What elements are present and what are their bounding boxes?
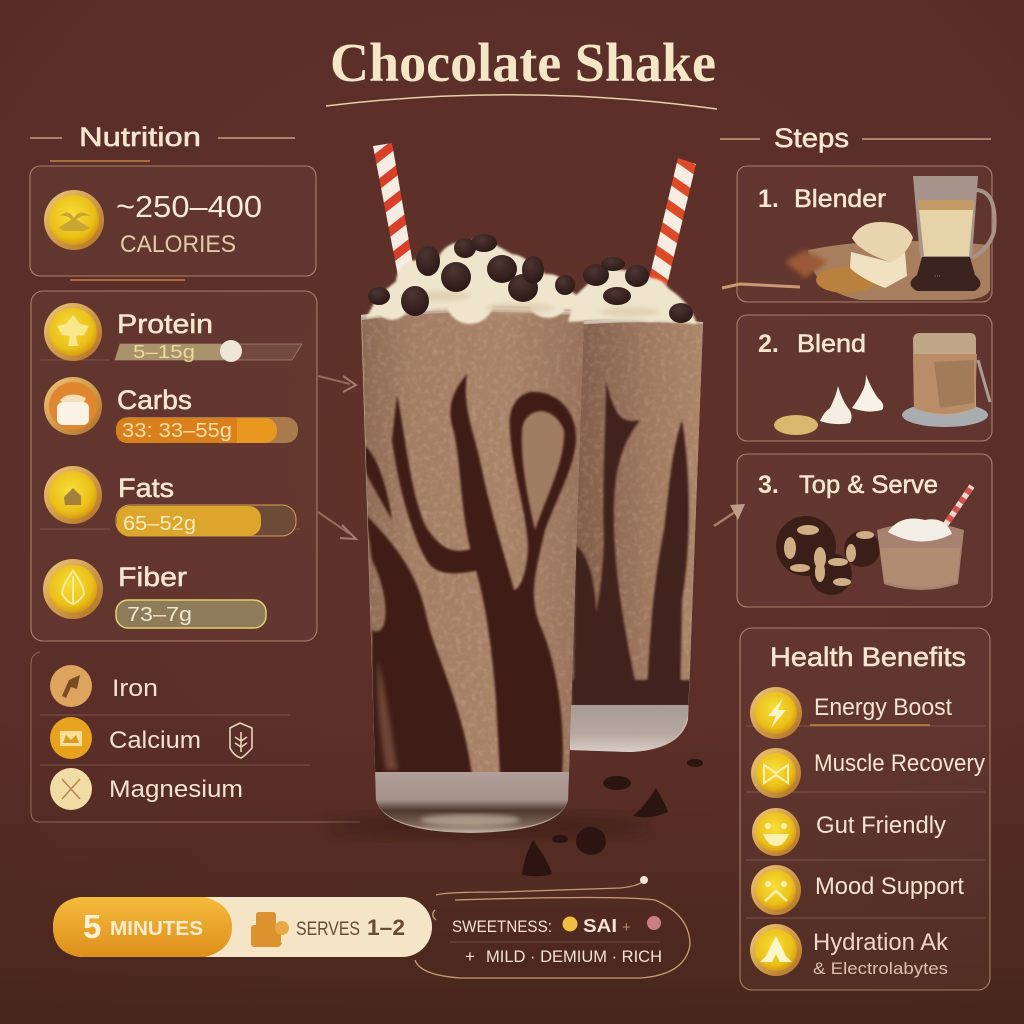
benefit: hydration: & Electrolabytes xyxy=(813,959,948,978)
bar: protein: 5–15g xyxy=(133,342,195,362)
mineral: iron: Iron xyxy=(112,675,158,702)
panel: macros xyxy=(31,291,317,641)
step 1 xyxy=(722,166,995,302)
step 3: Top & Serve xyxy=(799,471,938,499)
panel: steps xyxy=(714,123,995,607)
icon: calories coin xyxy=(44,190,104,250)
step 3: 3. xyxy=(758,471,779,499)
illustration: cookie and cream xyxy=(774,375,883,435)
title: Chocolate Shake xyxy=(330,32,716,93)
mineral: magnesium xyxy=(50,768,243,810)
time pill: MINUTES xyxy=(110,918,203,940)
panel: sweetness: + xyxy=(622,919,631,936)
bar: carbs: 33: 33–55g xyxy=(122,420,232,442)
bar: fats xyxy=(116,505,296,536)
benefit: energy boost: Energy Boost xyxy=(814,694,952,721)
macro: carbs: Carbs xyxy=(117,385,192,415)
benefit: gut friendly xyxy=(752,808,946,856)
benefit: hydration: Hydration Ak xyxy=(813,929,949,956)
servings text: SERVES xyxy=(296,919,360,940)
macro: protein xyxy=(44,303,302,362)
bar: protein xyxy=(115,340,302,362)
benefit: mood support xyxy=(751,865,964,915)
icon: servings xyxy=(251,912,289,947)
macro: fiber: Fiber xyxy=(118,562,187,592)
scattered chocolate chips xyxy=(522,759,703,876)
illustration: blend jug xyxy=(902,333,990,427)
mineral: iron xyxy=(50,665,158,707)
step 3 xyxy=(737,454,992,607)
illustration: blender xyxy=(910,176,995,291)
macro: fats: Fats xyxy=(118,473,174,503)
macro: fats xyxy=(44,466,296,536)
straw: back xyxy=(649,158,696,285)
icon: protein coin xyxy=(44,303,102,361)
arrows: nutrition to shake xyxy=(318,376,356,539)
macro: protein: Protein xyxy=(117,309,213,339)
panel: sweetness: SWEETNESS: xyxy=(452,917,552,936)
benefit: hydration xyxy=(750,924,949,978)
step 1: Blender xyxy=(794,185,886,213)
bar: carbs xyxy=(116,417,298,443)
mineral: magnesium: Magnesium xyxy=(109,776,243,803)
panel: health benefits xyxy=(740,628,990,990)
panel: calories xyxy=(30,166,316,276)
bar: fats: 65–52g xyxy=(123,513,196,535)
servings text: 1–2 xyxy=(367,915,405,940)
calories label: CALORIES xyxy=(120,231,236,258)
illustration: served glass with straw xyxy=(877,486,972,590)
step 1: 1. xyxy=(758,185,779,213)
panel: minerals xyxy=(31,652,360,822)
step 2: Blend xyxy=(797,330,866,358)
heading: steps: Steps xyxy=(774,123,849,153)
panel: sweetness xyxy=(415,876,690,978)
straw: front xyxy=(373,143,414,276)
arrow: step 3 xyxy=(714,504,745,526)
whipped cream xyxy=(366,236,697,324)
icon: fiber coin xyxy=(43,559,103,619)
panel: sweetness: MILD · DEMIUM · RICH xyxy=(486,947,662,966)
calories value: ~250–400 xyxy=(116,189,262,224)
panel: nutrition xyxy=(30,122,317,641)
illustration: plate and cake xyxy=(785,222,990,300)
mineral: calcium: Calcium xyxy=(109,727,201,754)
servings text xyxy=(296,915,405,940)
bar: fiber: 73–7g xyxy=(127,604,192,626)
benefit: muscle recovery: Muscle Recovery xyxy=(814,750,985,777)
step 2 xyxy=(737,315,992,441)
panel: sweetness: + xyxy=(465,947,475,966)
time pill: 5 xyxy=(83,908,101,945)
icon: carbs coin xyxy=(44,377,102,435)
glass: back xyxy=(570,319,710,752)
bottom bar: time and servings xyxy=(53,897,432,957)
panel: sweetness: SAI xyxy=(583,916,617,936)
benefit: muscle recovery xyxy=(751,748,985,798)
chocolate chips on cream xyxy=(368,234,693,323)
benefit: mood support: Mood Support xyxy=(815,873,964,900)
illustration: chocolate shakes xyxy=(330,143,710,876)
floor shadow xyxy=(330,812,650,840)
illustration: blender: ∙∙∙ xyxy=(934,271,941,280)
step 2: 2. xyxy=(758,330,779,358)
illustration: cookies xyxy=(776,516,880,595)
bar: fiber xyxy=(116,600,266,628)
mineral: calcium xyxy=(50,717,252,759)
time pill xyxy=(53,897,232,957)
macro: fiber xyxy=(43,559,266,628)
benefit: energy boost xyxy=(750,687,952,739)
macro: carbs xyxy=(44,377,298,443)
heading: nutrition: Nutrition xyxy=(79,122,201,152)
glass: front xyxy=(355,307,590,834)
icon: fats coin xyxy=(44,466,102,524)
icon: calcium badge xyxy=(230,723,252,758)
heading: health benefits: Health Benefits xyxy=(770,642,966,672)
benefit: gut friendly: Gut Friendly xyxy=(816,812,946,839)
